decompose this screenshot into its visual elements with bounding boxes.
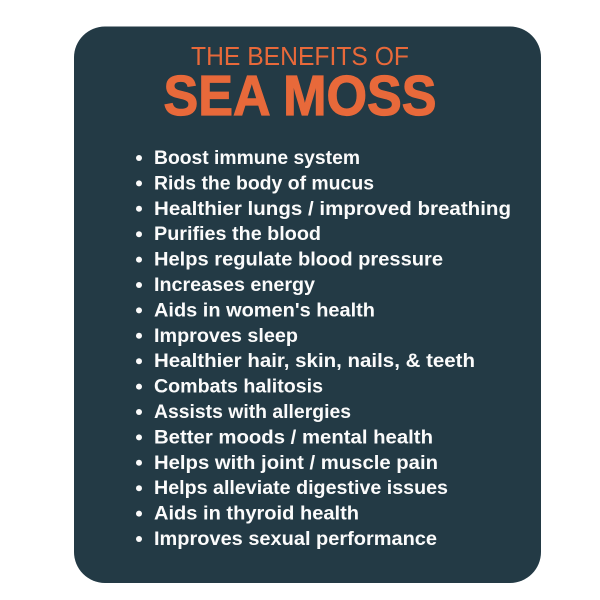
list items [154,148,511,550]
list items: Healthier lungs / improved breathing [154,199,511,220]
bullets [136,155,142,542]
list items: Purifies the blood [154,224,321,245]
list items: Improves sexual performance [154,529,437,550]
list items: Aids in women's health [154,300,375,321]
list items: Healthier hair, skin, nails, & teeth [154,351,475,372]
list items: Helps alleviate digestive issues [154,478,448,499]
title [164,41,436,128]
list items: Better moods / mental health [154,427,433,448]
list items: Helps regulate blood pressure [154,250,443,271]
list items: Aids in thyroid health [154,504,359,525]
list items: Rids the body of mucus [154,173,374,194]
list items: Helps with joint / muscle pain [154,453,438,474]
panel: background card [74,26,541,583]
list items: Increases energy [154,275,315,296]
list items: Assists with allergies [154,402,351,423]
benefits list [136,148,511,550]
list items: Combats halitosis [154,377,323,398]
heading: sea moss: SEA MOSS [164,64,436,128]
list items: Improves sleep [154,326,298,347]
list items: Boost immune system [154,148,360,169]
heading: the benefits of: THE BENEFITS OF [191,41,409,71]
